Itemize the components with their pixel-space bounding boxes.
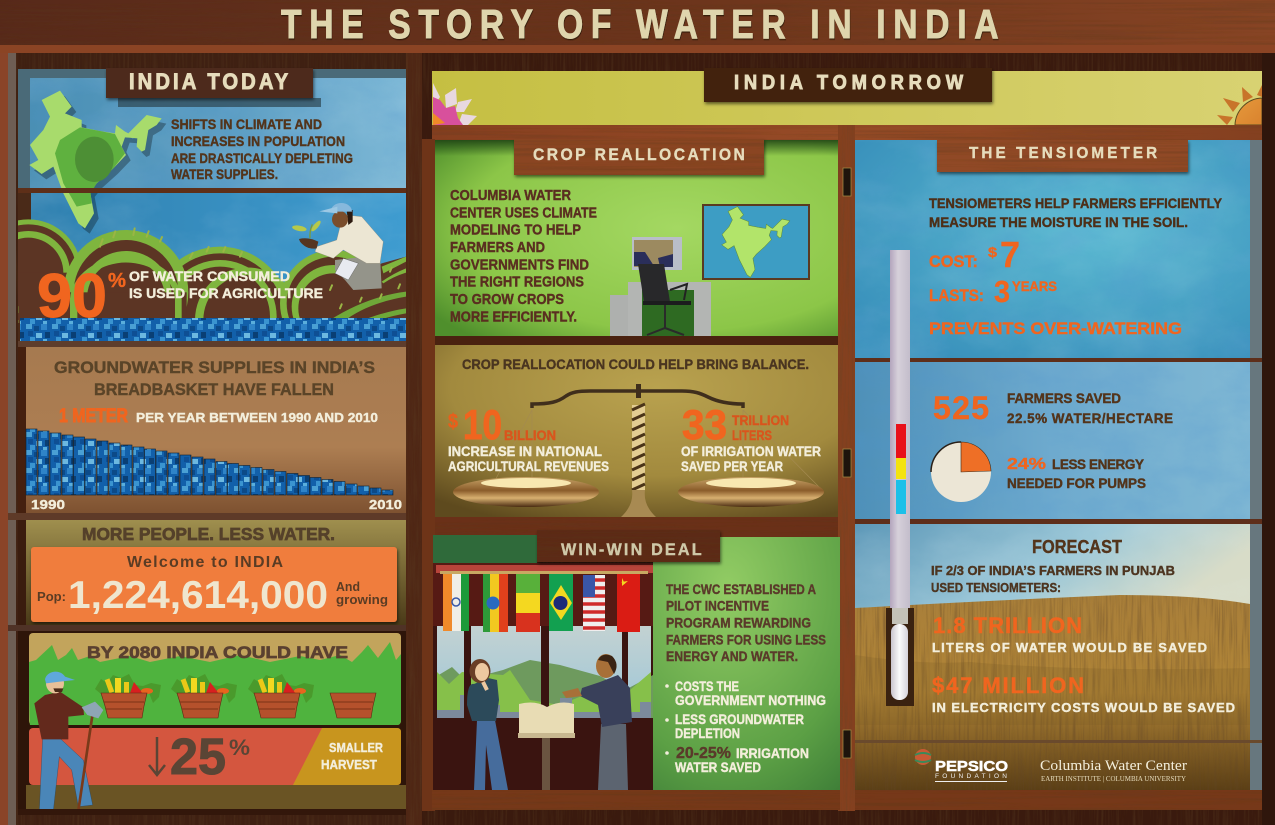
bullet list — [666, 679, 826, 775]
statistic: 33 trillion: OF IRRIGATION WATER — [681, 444, 821, 459]
statistics: cost and lifetime — [929, 234, 1182, 338]
icon: balance scale — [453, 384, 824, 517]
population sign: growing — [336, 592, 388, 607]
icon: sun — [1217, 85, 1262, 125]
statistics: cost and lifetime: 7 — [1000, 234, 1020, 275]
desk, computer and chair — [610, 237, 711, 336]
text: pilot incentive — [666, 581, 826, 664]
window scene — [433, 563, 653, 790]
text: tensiometer description: TENSIOMETERS HELP FARMERS EFFICIENTLY — [929, 196, 1222, 211]
population sign: Welcome to INDIA — [127, 554, 283, 571]
statistic: 33 trillion: SAVED PER YEAR — [681, 459, 783, 474]
panel: agriculture — [0, 91, 406, 387]
icon: full basket 2 — [171, 674, 237, 718]
flag: Ethiopia — [483, 574, 508, 632]
statistic: 33 trillion — [681, 401, 821, 474]
statistic: 525 farmers — [933, 390, 1173, 426]
water glitter strip — [20, 318, 406, 341]
panel: groundwater — [18, 347, 406, 514]
open book on lectern — [518, 703, 575, 790]
logo: Columbia Water Center — [1040, 758, 1187, 783]
bar: 25 percent smaller harvest: SMALLER — [329, 740, 384, 755]
statistic: 525 farmers: 525 — [933, 390, 989, 426]
statistics: forecast savings: LITERS OF WATER WOULD BE SAVED — [932, 640, 1207, 655]
icon: lotus flower — [433, 83, 477, 125]
gauge colors — [896, 424, 906, 514]
bar: 25 percent smaller harvest — [29, 728, 401, 785]
bar: 25 percent smaller harvest: 25 — [170, 728, 226, 785]
heading tag: the tensiometer — [937, 140, 1188, 172]
bullet list: LESS GROUNDWATER — [675, 712, 804, 727]
bar: 25 percent smaller harvest: % — [229, 735, 250, 760]
title: THE STORY OF WATER IN INDIA — [281, 1, 998, 47]
statistics: forecast savings — [932, 613, 1235, 715]
statistics: cost and lifetime: LASTS: — [929, 286, 984, 305]
statistic: 10 billion: BILLION — [504, 428, 556, 443]
soil layer — [855, 595, 1262, 790]
statistic: 90 percent: IS USED FOR AGRICULTURE — [129, 286, 323, 301]
text: forecast condition: USED TENSIOMETERS: — [931, 580, 1061, 595]
text: climate modeling: FARMERS AND — [450, 240, 545, 256]
text: pilot incentive: THE CWC ESTABLISHED A — [666, 581, 816, 597]
text: less energy: 24% — [1007, 456, 1046, 473]
text: 1 meter per year: PER YEAR BETWEEN 1990 AND 2010 — [136, 410, 378, 425]
statistic: 10 billion — [448, 401, 609, 474]
icon: India map — [29, 91, 166, 234]
heading tag: India tomorrow — [704, 68, 992, 102]
heading tag: crop reallocation: CROP REALLOCATION — [533, 146, 745, 164]
wall map of India — [703, 205, 809, 279]
icon: empty basket — [330, 693, 376, 718]
heading: groundwater — [54, 359, 375, 399]
axis labels — [31, 497, 402, 512]
statistic: 90 percent: % — [108, 270, 126, 292]
text: pilot incentive: FARMERS FOR USING LESS — [666, 631, 826, 647]
text: climate and population: WATER SUPPLIES. — [171, 166, 278, 182]
statistic: 525 farmers: FARMERS SAVED — [1007, 391, 1121, 406]
statistic: 10 billion: $ — [448, 411, 458, 433]
panel: India today climate — [18, 68, 406, 189]
text: climate modeling: GOVERNMENTS FIND — [450, 257, 589, 273]
text: climate modeling — [450, 188, 597, 325]
flag: Brazil — [549, 574, 573, 631]
heading tag: crop reallocation — [514, 139, 764, 175]
heading tag: the tensiometer: THE TENSIOMETER — [969, 145, 1157, 162]
heading tag: India tomorrow: INDIA TOMORROW — [734, 72, 964, 94]
panel: crop reallocation — [435, 139, 838, 336]
icon: full basket 1 — [95, 674, 161, 718]
text: less energy — [1007, 456, 1146, 491]
text: climate modeling: COLUMBIA WATER — [450, 188, 571, 204]
heading: groundwater: GROUNDWATER SUPPLIES IN INDIA’S — [54, 359, 375, 377]
statistics: cost and lifetime: YEARS — [1012, 278, 1057, 294]
heading: forecast: FORECAST — [1032, 536, 1123, 557]
statistic: 90 percent — [37, 262, 323, 331]
icon: full basket 3 — [248, 674, 314, 718]
right column wooden frame — [422, 53, 1275, 825]
population sign: Pop: — [37, 589, 66, 604]
text: 1 meter per year — [59, 406, 378, 427]
axis labels: 2010 — [369, 497, 402, 512]
flag: USA — [583, 575, 605, 631]
logo: Columbia Water Center: EARTH INSTITUTE | COLUMBIA UNIVERSITY — [1041, 775, 1186, 783]
text: climate modeling: THE RIGHT REGIONS — [450, 275, 584, 291]
statistics: forecast savings: 1.8 TRILLION — [933, 613, 1082, 638]
panel: harvest forecast — [18, 631, 406, 811]
text: climate and population: INCREASES IN POPULATION — [171, 133, 345, 149]
panel: the tensiometer — [855, 140, 1262, 790]
logo: PepsiCo Foundation: PEPSICO — [935, 758, 1008, 775]
bar: 25 percent smaller harvest: HARVEST — [321, 757, 377, 772]
population sign: 1,224,614,000 — [68, 574, 328, 617]
bar chart: declining groundwater — [26, 429, 393, 495]
pie chart: 24 percent — [931, 442, 991, 502]
population sign: And — [336, 579, 360, 594]
flag: China — [617, 574, 640, 632]
text: less energy: NEEDED FOR PUMPS — [1007, 476, 1146, 491]
statistic: 90 percent: 90 — [37, 262, 107, 331]
text: climate modeling: MORE EFFICIENTLY. — [450, 309, 577, 325]
panel: balance scale — [435, 336, 838, 517]
text: tensiometer description — [929, 196, 1222, 230]
heading tag: India today: INDIA TODAY — [129, 70, 288, 94]
bullet list: IRRIGATION — [736, 746, 809, 761]
logo: Columbia Water Center: Columbia Water Center — [1040, 758, 1187, 774]
panel: population — [18, 520, 406, 625]
grass field — [29, 642, 401, 725]
person: man — [562, 654, 632, 790]
bullet list: GOVERNMENT NOTHING — [675, 693, 826, 708]
text: tensiometer description: MEASURE THE MOISTURE IN THE SOIL. — [929, 215, 1188, 230]
statistics: forecast savings: $47 MILLION — [932, 673, 1084, 698]
flag: Mali — [516, 574, 540, 632]
heading: groundwater: BREADBASKET HAVE FALLEN — [94, 381, 334, 399]
statistic: 90 percent: OF WATER CONSUMED — [129, 269, 290, 284]
text: forecast condition: IF 2/3 OF INDIA’S FARMERS IN PUNJAB — [931, 563, 1175, 578]
statistics: forecast savings: IN ELECTRICITY COSTS WOULD BE SAVED — [932, 700, 1235, 715]
title plank — [0, 0, 1275, 53]
text: climate and population: SHIFTS IN CLIMATE AND — [171, 116, 322, 132]
statistic: 525 farmers: 22.5% WATER/HECTARE — [1007, 411, 1173, 426]
logo: PepsiCo Foundation — [915, 749, 1008, 782]
heading: bring balance: CROP REALLOCATION COULD HELP BRING BALANCE. — [462, 356, 809, 372]
person: woman — [467, 659, 508, 790]
icon: farmer with seedling — [292, 203, 383, 290]
statistics: cost and lifetime: PREVENTS OVER-WATERING — [929, 319, 1182, 338]
statistic: 33 trillion: TRILLION — [732, 413, 789, 428]
flags — [443, 574, 640, 632]
icon: tensiometer tube — [886, 250, 914, 706]
text: pilot incentive: PILOT INCENTIVE — [666, 598, 769, 614]
curtain rod — [440, 571, 648, 574]
text: climate modeling: TO GROW CROPS — [450, 292, 564, 308]
panel: win-win deal — [433, 530, 840, 790]
bullet list: 20-25% — [676, 745, 731, 762]
statistic: 10 billion: 10 — [463, 401, 502, 448]
text: pilot incentive: PROGRAM REWARDING — [666, 615, 811, 631]
panel: India tomorrow banner — [432, 68, 1262, 126]
flag: India — [443, 574, 469, 631]
statistics: cost and lifetime: 3 — [994, 274, 1010, 309]
text: climate modeling: MODELING TO HELP — [450, 223, 581, 239]
logo: PepsiCo Foundation: FOUNDATION — [935, 773, 1007, 780]
statistics: cost and lifetime: $ — [988, 244, 997, 260]
statistic: 10 billion: AGRICULTURAL REVENUES — [448, 459, 609, 474]
heading: by 2080: BY 2080 INDIA COULD HAVE — [87, 643, 348, 662]
statistics: cost and lifetime: COST: — [929, 252, 978, 271]
bullet list: COSTS THE — [675, 679, 739, 694]
bullet list: WATER SAVED — [675, 760, 761, 775]
text: 1 meter per year: 1 METER — [59, 406, 128, 427]
heading tag: India today — [106, 68, 321, 107]
heading tag: win-win deal: WIN-WIN DEAL — [561, 540, 702, 559]
statistic: 33 trillion: 33 — [682, 401, 727, 448]
axis labels: 1990 — [31, 497, 65, 512]
text: climate modeling: CENTER USES CLIMATE — [450, 205, 597, 221]
bullet list: DEPLETION — [675, 726, 740, 741]
statistic: 10 billion: INCREASE IN NATIONAL — [448, 444, 602, 459]
text: less energy: LESS ENERGY — [1052, 457, 1144, 472]
statistic: 33 trillion: LITERS — [732, 428, 772, 443]
heading: more people less water: MORE PEOPLE. LESS WATER. — [82, 524, 335, 544]
text: pilot incentive: ENERGY AND WATER. — [666, 648, 798, 664]
text: forecast condition — [931, 563, 1175, 595]
heading tag: win-win deal — [537, 530, 720, 562]
text: climate and population — [171, 116, 353, 182]
icon: farmer with hoe — [34, 672, 103, 811]
hinges — [843, 168, 851, 758]
population sign — [31, 547, 397, 622]
text: climate and population: ARE DRASTICALLY DEPLETING — [171, 150, 353, 166]
